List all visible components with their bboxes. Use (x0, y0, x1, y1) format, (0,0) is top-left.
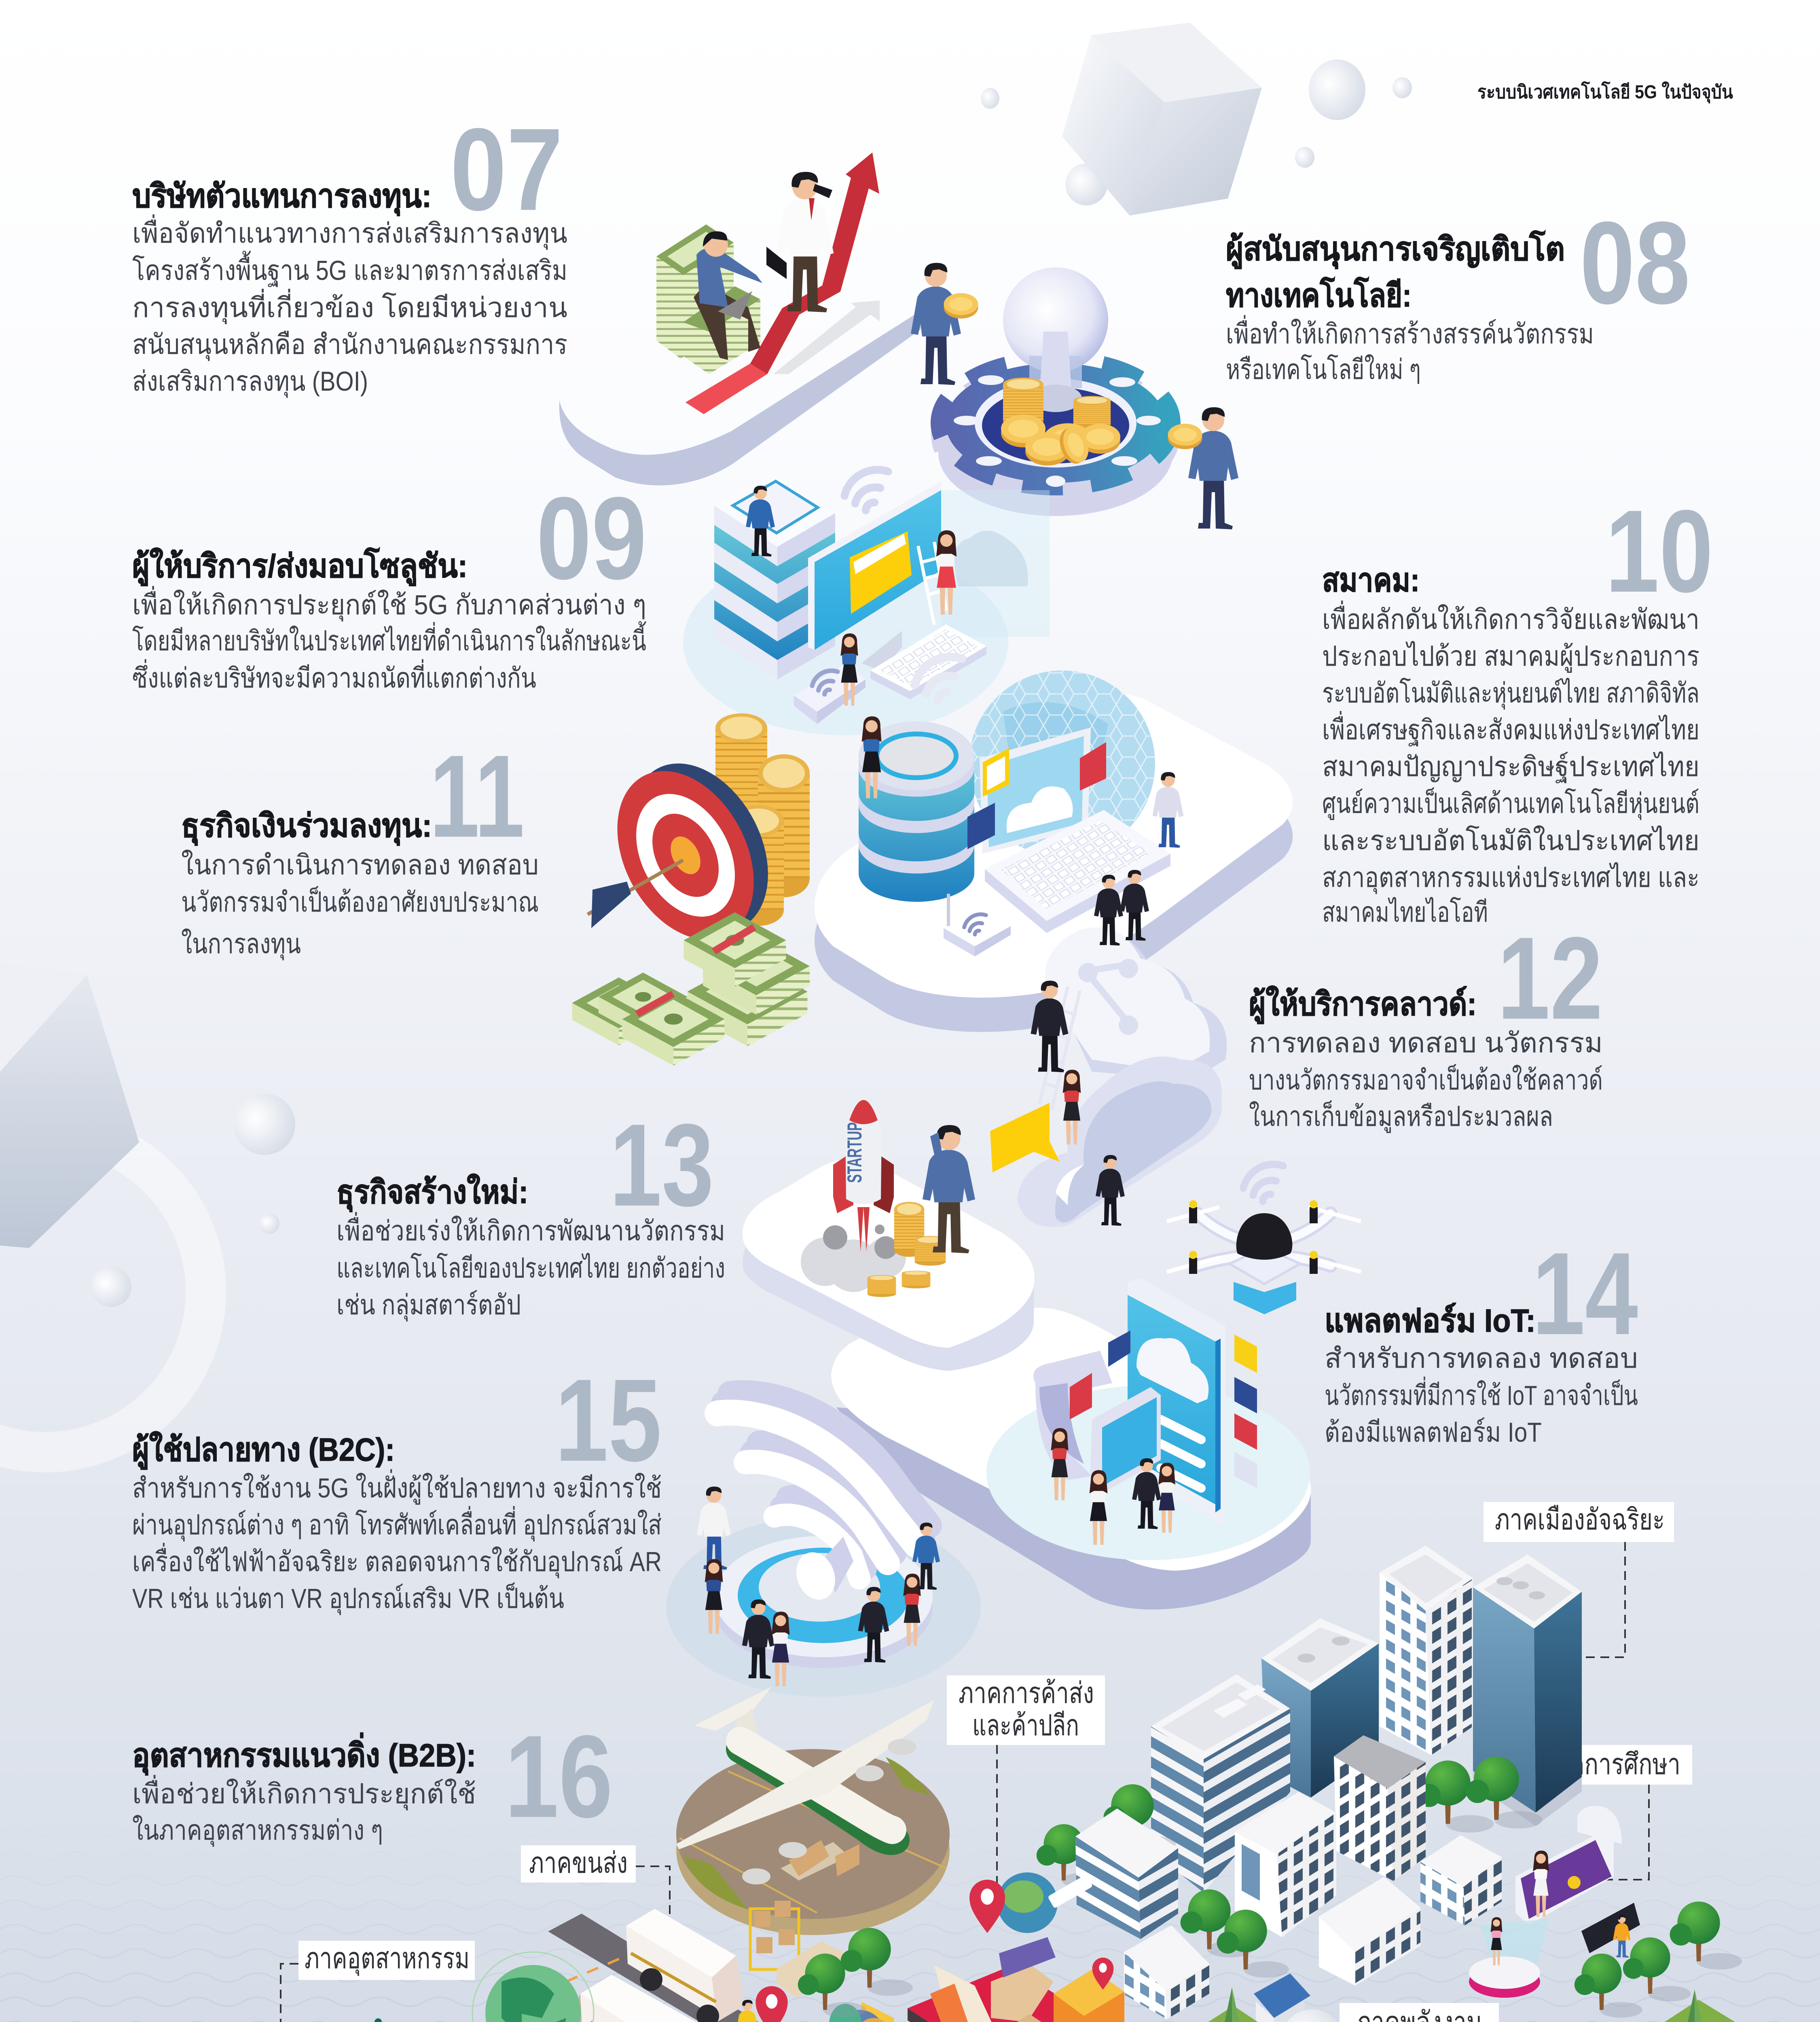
laptop and globe search (999, 1937, 1056, 1978)
panel 09 text: เพื่อให้เกิดการประยุกต์ใช้ 5G กับภาคส่วนต่าง ๆ (132, 586, 646, 622)
panel 12 text: 12 (1497, 913, 1603, 1044)
panel 10 text (1322, 486, 1713, 928)
panel 14 text: ต้องมีแพลตฟอร์ม IoT (1325, 1417, 1542, 1448)
panel 13 text: เพื่อช่วยเร่งให้เกิดการพัฒนานวัตกรรม (336, 1212, 725, 1246)
plane (676, 1687, 934, 1885)
illustration: association data globe, database and laptop (859, 670, 1183, 956)
router (944, 894, 1011, 956)
ladder (1039, 987, 1080, 1110)
keyboard (870, 624, 986, 699)
green globe (485, 1965, 581, 2022)
platform: IoT slab (831, 1308, 1311, 1610)
panel 11 text: ในการดำเนินการทดลอง ทดสอบ (181, 849, 539, 880)
panel 16 text: ในภาคอุตสาหกรรมต่าง ๆ (132, 1815, 383, 1847)
panel 08 text: ผู้สนับสนุนการเจริญเติบโต (1226, 230, 1565, 269)
lower right building (1319, 1877, 1420, 1986)
illustration: cloud service provider (990, 870, 1227, 1227)
panel 07 text: 07 (450, 104, 563, 235)
money stacks (656, 224, 760, 374)
panel 09 text: ซึ่งแต่ละบริษัทจะมีความถนัดที่แตกต่างกัน (132, 659, 536, 694)
panel 10 text: สมาคม: (1322, 562, 1420, 598)
panel 10 text: เพื่อผลักดันให้เกิดการวิจัยและพัฒนา (1322, 601, 1699, 635)
panel 12 text (1249, 913, 1603, 1133)
panel 09 text: โดยมีหลายบริษัทในประเทศไทยที่ดำเนินการในลักษณะนี้ (132, 621, 646, 656)
label: retail sector: ภาคการค้าส่ง (959, 1677, 1094, 1709)
people (1031, 981, 1069, 1072)
illustration: logistics road, vans and warehouse (548, 1901, 913, 2022)
panel 07 text: บริษัทตัวแทนการลงทุน: (132, 178, 432, 216)
medium building (1235, 1792, 1336, 1937)
panel 15 text: เครื่องใช้ไฟฟ้าอัจฉริยะ ตลอดจนการใช้กับอุปกรณ์ AR (132, 1543, 662, 1578)
panel 13 text: ธุรกิจสร้างใหม่: (336, 1173, 528, 1212)
panel 07 text: ส่งเสริมการลงทุน (BOI) (132, 366, 368, 398)
coins (894, 1202, 924, 1257)
panel 08 text: 08 (1580, 197, 1690, 328)
decorative shard, ring and bubbles on left (0, 963, 295, 1452)
panel 15 text: 15 (555, 1355, 662, 1486)
figures carrying coins (911, 263, 1238, 529)
app icons (1070, 1330, 1257, 1488)
label: retail sector: และค้าปลีก (972, 1709, 1079, 1742)
illustration: retail e-commerce phone platform (829, 1872, 1147, 2022)
people (1051, 1428, 1069, 1500)
panel 10 text: ระบบอัตโนมัติและหุ่นยนต์ไทย สภาดิจิทัล (1322, 677, 1699, 710)
panel 07 text: สนับสนุนหลักคือ สำนักงานคณะกรรมการ (132, 329, 567, 361)
panel 14 text: นวัตกรรมที่มีการใช้ IoT อาจจำเป็น (1325, 1377, 1638, 1411)
header: ระบบนิเวศเทคโนโลยี 5G ในปัจจุบัน (1477, 81, 1733, 104)
platform: top slab (559, 309, 923, 485)
panel 12 text: การทดลอง ทดสอบ นวัตกรรม (1249, 1028, 1603, 1058)
panel 12 text: บางนวัตกรรมอาจจำเป็นต้องใช้คลาวด์ (1249, 1064, 1603, 1096)
low striped building (1075, 1808, 1178, 1939)
laptop (980, 728, 1170, 933)
label: smart city sector: ภาคเมืองอัจฉริยะ (1495, 1504, 1665, 1536)
label: industry sector (281, 1941, 475, 2022)
man pointing (923, 1125, 975, 1253)
panel 11 text: ธุรกิจเงินร่วมลงทุน: (181, 808, 432, 846)
label: transport sector (521, 1845, 670, 1915)
panel 13 text: เช่น กลุ่มสตาร์ตอัป (336, 1290, 521, 1322)
clothes rack (829, 2002, 894, 2022)
panel 08 text: เพื่อทำให้เกิดการสร้างสรรค์นวัตกรรม (1226, 315, 1594, 349)
panel 16 text (132, 1711, 613, 1847)
panel 07 text (132, 104, 567, 398)
panel 07 text: เพื่อจัดทำแนวทางการส่งเสริมการลงทุน (132, 214, 567, 250)
smoke (801, 1237, 906, 1292)
glass tower right (1473, 1555, 1582, 1826)
trees behind (1037, 1756, 1542, 1888)
man with binoculars (776, 172, 834, 312)
phone (1128, 1278, 1225, 1525)
man standing (1153, 772, 1183, 848)
online education (1469, 1806, 1640, 1998)
users (697, 1487, 731, 1569)
panel 11 text (181, 731, 539, 960)
spheres (1206, 2009, 1344, 2022)
panel 12 text: ในการเก็บข้อมูลหรือประมวลผล (1249, 1100, 1553, 1133)
street trees (1181, 1889, 1742, 2018)
panel 13 text: 13 (609, 1100, 714, 1231)
seated investor (694, 231, 762, 360)
label: smart city sector (1484, 1502, 1674, 1657)
upper cloud (1045, 927, 1227, 1080)
panel 13 text: และเทคโนโลยีของประเทศไทย ยกตัวอย่าง (336, 1252, 725, 1284)
panel 16 text: เพื่อช่วยให้เกิดการประยุกต์ใช้ (132, 1775, 476, 1810)
woman on database (862, 716, 881, 798)
illustration: growth arrow with investors (656, 152, 880, 414)
van one (626, 1909, 744, 2022)
panel 08 text: ทางเทคโนโลยี: (1226, 276, 1412, 313)
panel 16 text: อุตสาหกรรมแนวดิ่ง (B2B): (132, 1732, 476, 1776)
panel 11 text: 11 (430, 731, 525, 862)
illustration: smart city buildings (1037, 1546, 1742, 2022)
panel 14 text (1325, 1228, 1638, 1448)
server stack (714, 472, 835, 679)
grass patches (1189, 1987, 1735, 2022)
decorative cube and bubbles (981, 23, 1412, 216)
illustration: drone (1167, 1164, 1361, 1314)
panel 09 text: ผู้ให้บริการ/ส่งมอบโซลูชัน: (132, 547, 468, 586)
label: retail sector (947, 1675, 1105, 1893)
panel 16 text: 16 (505, 1711, 613, 1842)
panel 10 text: สมาคมไทยไอโอที (1322, 897, 1488, 928)
illustration: innovation gear with light bulb (938, 267, 1173, 516)
striped tower (1151, 1674, 1290, 1893)
illustration: solution provider servers and screen (683, 470, 1050, 735)
illustration: startup rocket: STARTUP (843, 1122, 866, 1183)
panel 15 text: สำหรับการใช้งาน 5G ในฝั่งผู้ใช้ปลายทาง จะมีการใช้ (132, 1469, 662, 1505)
monitor (808, 481, 941, 671)
small building (1124, 1925, 1209, 2019)
blue roof house (1254, 1973, 1310, 2022)
van two (574, 1975, 700, 2022)
panel 11 text: ในการลงทุน (181, 928, 301, 960)
money bundles (684, 912, 810, 1046)
cloud icon (954, 531, 1028, 586)
panel 10 text: เพื่อเศรษฐกิจและสังคมแห่งประเทศไทย (1322, 711, 1699, 747)
database (859, 721, 974, 902)
panel 10 text: สมาคมปัญญาประดิษฐ์ประเทศไทย (1322, 751, 1699, 783)
illustration: IoT platform phone and smartwatch (986, 1278, 1310, 1560)
illustration: industrial robot, chip and network (324, 1952, 594, 2022)
arched building (1334, 1735, 1426, 1881)
panel 07 text: การลงทุนที่เกี่ยวข้อง โดยมีหน่วยงาน (132, 289, 567, 324)
illustration: target, coins and money (572, 713, 810, 1066)
panel 10 text: ประกอบไปด้วย สมาคมผู้ประกอบการ (1322, 641, 1699, 673)
illustration: startup rocket (801, 1100, 975, 1297)
panel 09 text: 09 (536, 473, 647, 604)
panel 09 text (132, 473, 647, 694)
small right building (1420, 1835, 1502, 1925)
platform: big cloud slab (815, 694, 1293, 1032)
panel 14 text: 14 (1532, 1228, 1638, 1359)
label: industry sector: ภาคอุตสาหกรรม (305, 1942, 470, 1976)
panel 08 text: หรือเทคโนโลยีใหม่ ๆ (1226, 354, 1421, 385)
label: transport sector: ภาคขนส่ง (529, 1847, 628, 1879)
watch (1033, 1351, 1112, 1480)
panel 15 text: VR เช่น แว่นตา VR อุปกรณ์เสริม VR เป็นต้น (132, 1582, 564, 1615)
rocket (857, 1207, 870, 1252)
warehouse shelf and desk (750, 1901, 845, 1998)
bags and boxes (934, 1965, 999, 2022)
illustration: end user wifi base (666, 1393, 981, 1697)
dark glass tower (1261, 1618, 1379, 1798)
label: energy sector (1340, 2003, 1499, 2022)
panel 10 text: สภาอุตสาหกรรมแห่งประเทศไทย และ (1322, 862, 1699, 894)
background (0, 588, 1820, 2022)
router and wifi (794, 470, 962, 724)
panel 10 text: ศูนย์ความเป็นเลิศด้านเทคโนโลยีหุ่นยนต์ (1322, 787, 1699, 820)
label: education sector: ภาคการศึกษา (1541, 1748, 1680, 1781)
illustration: energy plant (1160, 2009, 1494, 2022)
panel 15 text: ผู้ใช้ปลายทาง (B2C): (132, 1431, 395, 1470)
panel 12 text: ผู้ให้บริการคลาวด์: (1249, 985, 1477, 1024)
panel 10 text: 10 (1605, 486, 1713, 617)
white tower (1380, 1546, 1473, 1755)
lower cloud (1017, 1056, 1222, 1227)
panel 11 text: นวัตกรรมจำเป็นต้องอาศัยงบประมาณ (181, 886, 539, 918)
panel 07 text: โครงสร้างพื้นฐาน 5G และมาตรการส่งเสริม (132, 251, 567, 287)
floating icons (967, 742, 1106, 849)
panel 13 text (336, 1100, 725, 1322)
panel 10 text: และระบบอัตโนมัติในประเทศไทย (1322, 825, 1699, 856)
platform: rocket slab (743, 1159, 1035, 1371)
big wifi symbol (717, 1393, 929, 1605)
illustration: airport cargo disc with plane (676, 1687, 950, 1935)
speech bubble (990, 1103, 1060, 1172)
panel 15 text: ผ่านอุปกรณ์ต่าง ๆ อาทิ โทรศัพท์เคลื่อนที่ อุปกรณ์สวมใส่ (132, 1506, 662, 1542)
ladder and woman (918, 530, 957, 625)
panel 14 text: แพลตฟอร์ม IoT: (1325, 1303, 1536, 1339)
label: education sector (1529, 1745, 1692, 1880)
panel 14 text: สำหรับการทดลอง ทดสอบ (1325, 1343, 1638, 1374)
panel 08 text (1226, 197, 1690, 385)
panel 15 text (132, 1355, 662, 1615)
